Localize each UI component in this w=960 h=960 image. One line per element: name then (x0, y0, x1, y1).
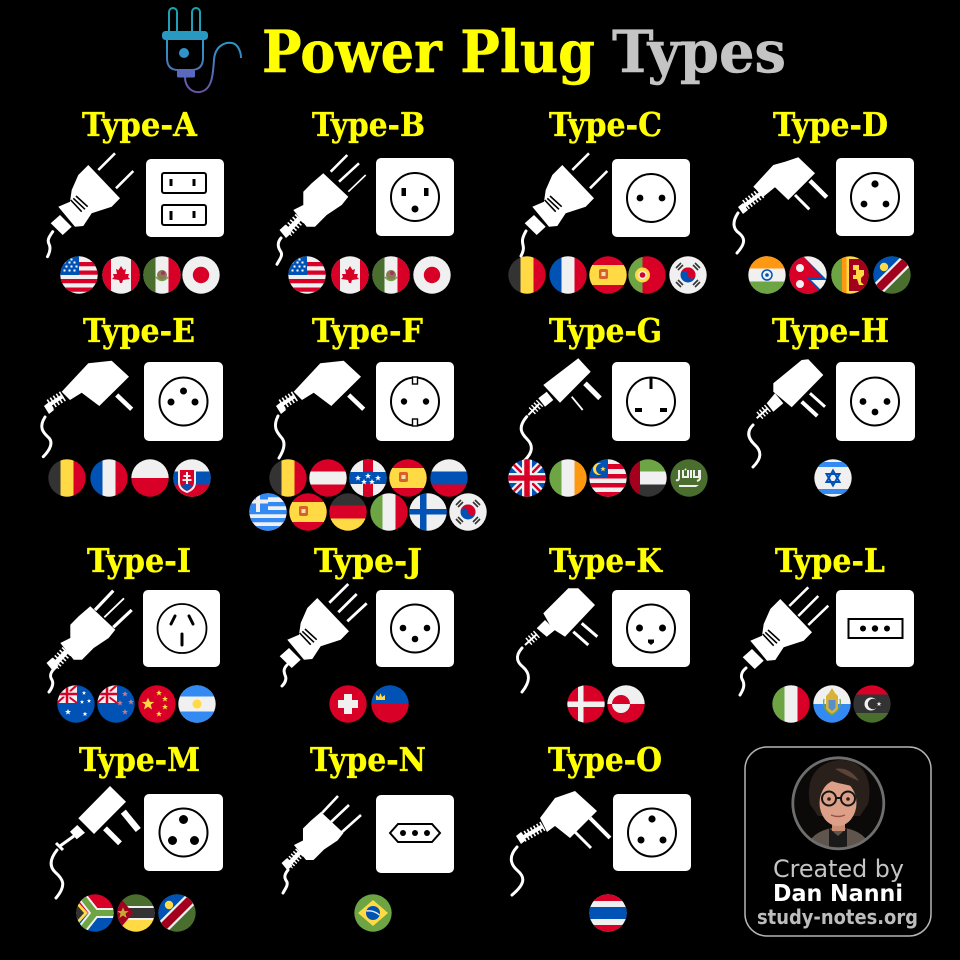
panel: Type-I (46, 541, 220, 724)
icon: socket D (836, 158, 914, 236)
icon: plug F (275, 361, 364, 458)
icon: plug D (734, 157, 827, 253)
heading: Type-M: Type-M (79, 740, 200, 779)
panel: Type-H (749, 311, 915, 497)
panel: Type-B (277, 105, 454, 294)
flags: Type-G (508, 459, 708, 498)
flags: Type-M (76, 894, 196, 932)
heading: Type-J: Type-J (314, 541, 422, 580)
icon: plug I (46, 591, 132, 692)
heading: Type-D: Type-D (773, 105, 888, 144)
icon: author portrait (793, 758, 884, 850)
text: Dan Nanni: Dan Nanni (773, 881, 903, 907)
panel: Type-A (48, 105, 224, 294)
flags: Type-B (288, 256, 451, 294)
icon: socket F (376, 362, 454, 441)
icon: plug K (517, 588, 597, 692)
panel: Type-J (280, 541, 454, 723)
icon: socket L (836, 590, 914, 667)
icon: socket K (612, 590, 690, 667)
panel: Type-K (517, 541, 690, 723)
title: Types: Types (612, 18, 786, 86)
title: Power Plug (262, 18, 595, 86)
icon: plug logo (162, 8, 241, 92)
flags: Type-L (772, 685, 891, 723)
heading: Type-O: Type-O (548, 740, 662, 779)
panel: Type-N (282, 740, 454, 932)
heading: Type-F: Type-F (312, 311, 423, 350)
flags: Type-E (48, 459, 211, 498)
icon: plug C (521, 153, 607, 256)
icon: plug L (740, 587, 828, 695)
flags: Type-K (567, 685, 645, 723)
panel: Type-L (740, 541, 914, 723)
icon: socket B (376, 158, 454, 236)
flags: Type-C (508, 256, 707, 294)
panel: Type-C (508, 105, 707, 294)
panel: Type-O (511, 740, 691, 932)
icon: socket H (836, 362, 915, 441)
text: study-notes.org: study-notes.org (757, 905, 918, 929)
icon: socket O (613, 794, 691, 871)
icon: socket A (146, 159, 224, 237)
flags: Type-F (249, 459, 487, 532)
icon: socket I (143, 590, 220, 667)
icon: plug J (280, 584, 367, 686)
icon: socket J (376, 590, 454, 667)
panel: Type-E (42, 311, 223, 498)
heading: Type-L: Type-L (775, 541, 885, 580)
icon: socket N (376, 795, 454, 873)
icon: plug M (51, 786, 138, 898)
flag: Israel (814, 459, 852, 497)
heading: Type-K: Type-K (549, 541, 663, 580)
heading: Type-A: Type-A (82, 105, 197, 144)
panel: Type-G (508, 311, 708, 498)
heading: Type-N: Type-N (310, 740, 426, 779)
text: Created by: Created by (773, 855, 904, 883)
flag: Brazil (354, 894, 392, 932)
icon: socket M (144, 794, 223, 871)
icon: plug B (277, 155, 366, 264)
flags: Type-J (329, 685, 409, 723)
flags: Type-A (60, 256, 220, 294)
icon: plug A (48, 153, 133, 257)
icon: socket E (144, 362, 223, 441)
icon: plug O (511, 791, 610, 895)
icon: socket G (612, 362, 690, 441)
heading: Type-H: Type-H (772, 311, 889, 350)
icon: plug G (521, 358, 600, 460)
heading: Type-I: Type-I (87, 541, 191, 580)
panel: Type-M (51, 740, 223, 932)
icon: socket C (612, 159, 690, 237)
panel: Type-D (734, 105, 914, 296)
flags: Type-D (748, 254, 911, 296)
panel: author credit card (745, 747, 931, 936)
heading: Type-G: Type-G (549, 311, 662, 350)
heading: Type-E: Type-E (83, 311, 195, 350)
heading: Type-C: Type-C (549, 105, 662, 144)
heading: Type-B: Type-B (312, 105, 425, 144)
flag: Thailand (589, 894, 627, 932)
icon: plug H (749, 359, 825, 467)
panel: Type-F (249, 311, 487, 532)
icon: plug N (282, 796, 361, 893)
icon: plug E (42, 361, 132, 457)
flags: Type-I (57, 685, 216, 724)
